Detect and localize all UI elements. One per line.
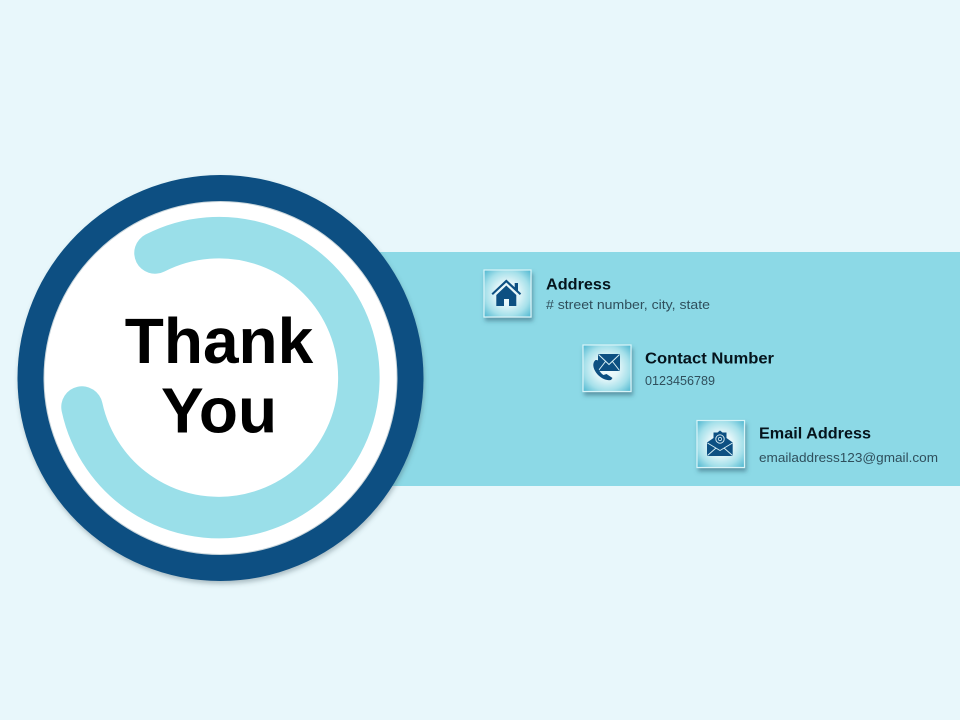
inner white disc: [44, 202, 397, 554]
icon: house: [484, 270, 531, 317]
contact item: email: [697, 420, 938, 468]
icon: phone and envelope: [583, 345, 631, 392]
light blue progress arc: [82, 238, 359, 518]
email address label: Email Address: [759, 426, 871, 442]
contact number detail: 0123456789: [645, 373, 715, 388]
contact number label: Contact Number: [645, 350, 774, 368]
contact item: address: [484, 270, 710, 317]
heading: Thank You: You: [161, 374, 277, 446]
outer navy ring: [18, 175, 424, 581]
contact item: phone: [583, 345, 774, 392]
icon: open envelope: [697, 420, 744, 468]
email address detail: emailaddress123@gmail.com: [759, 450, 938, 465]
circle badge: [18, 175, 424, 581]
address detail: # street number, city, state: [546, 297, 710, 312]
contact band: [330, 252, 960, 486]
heading: Thank You: [125, 305, 314, 446]
address label: Address: [546, 276, 611, 294]
heading: Thank You: Thank: [125, 305, 314, 377]
